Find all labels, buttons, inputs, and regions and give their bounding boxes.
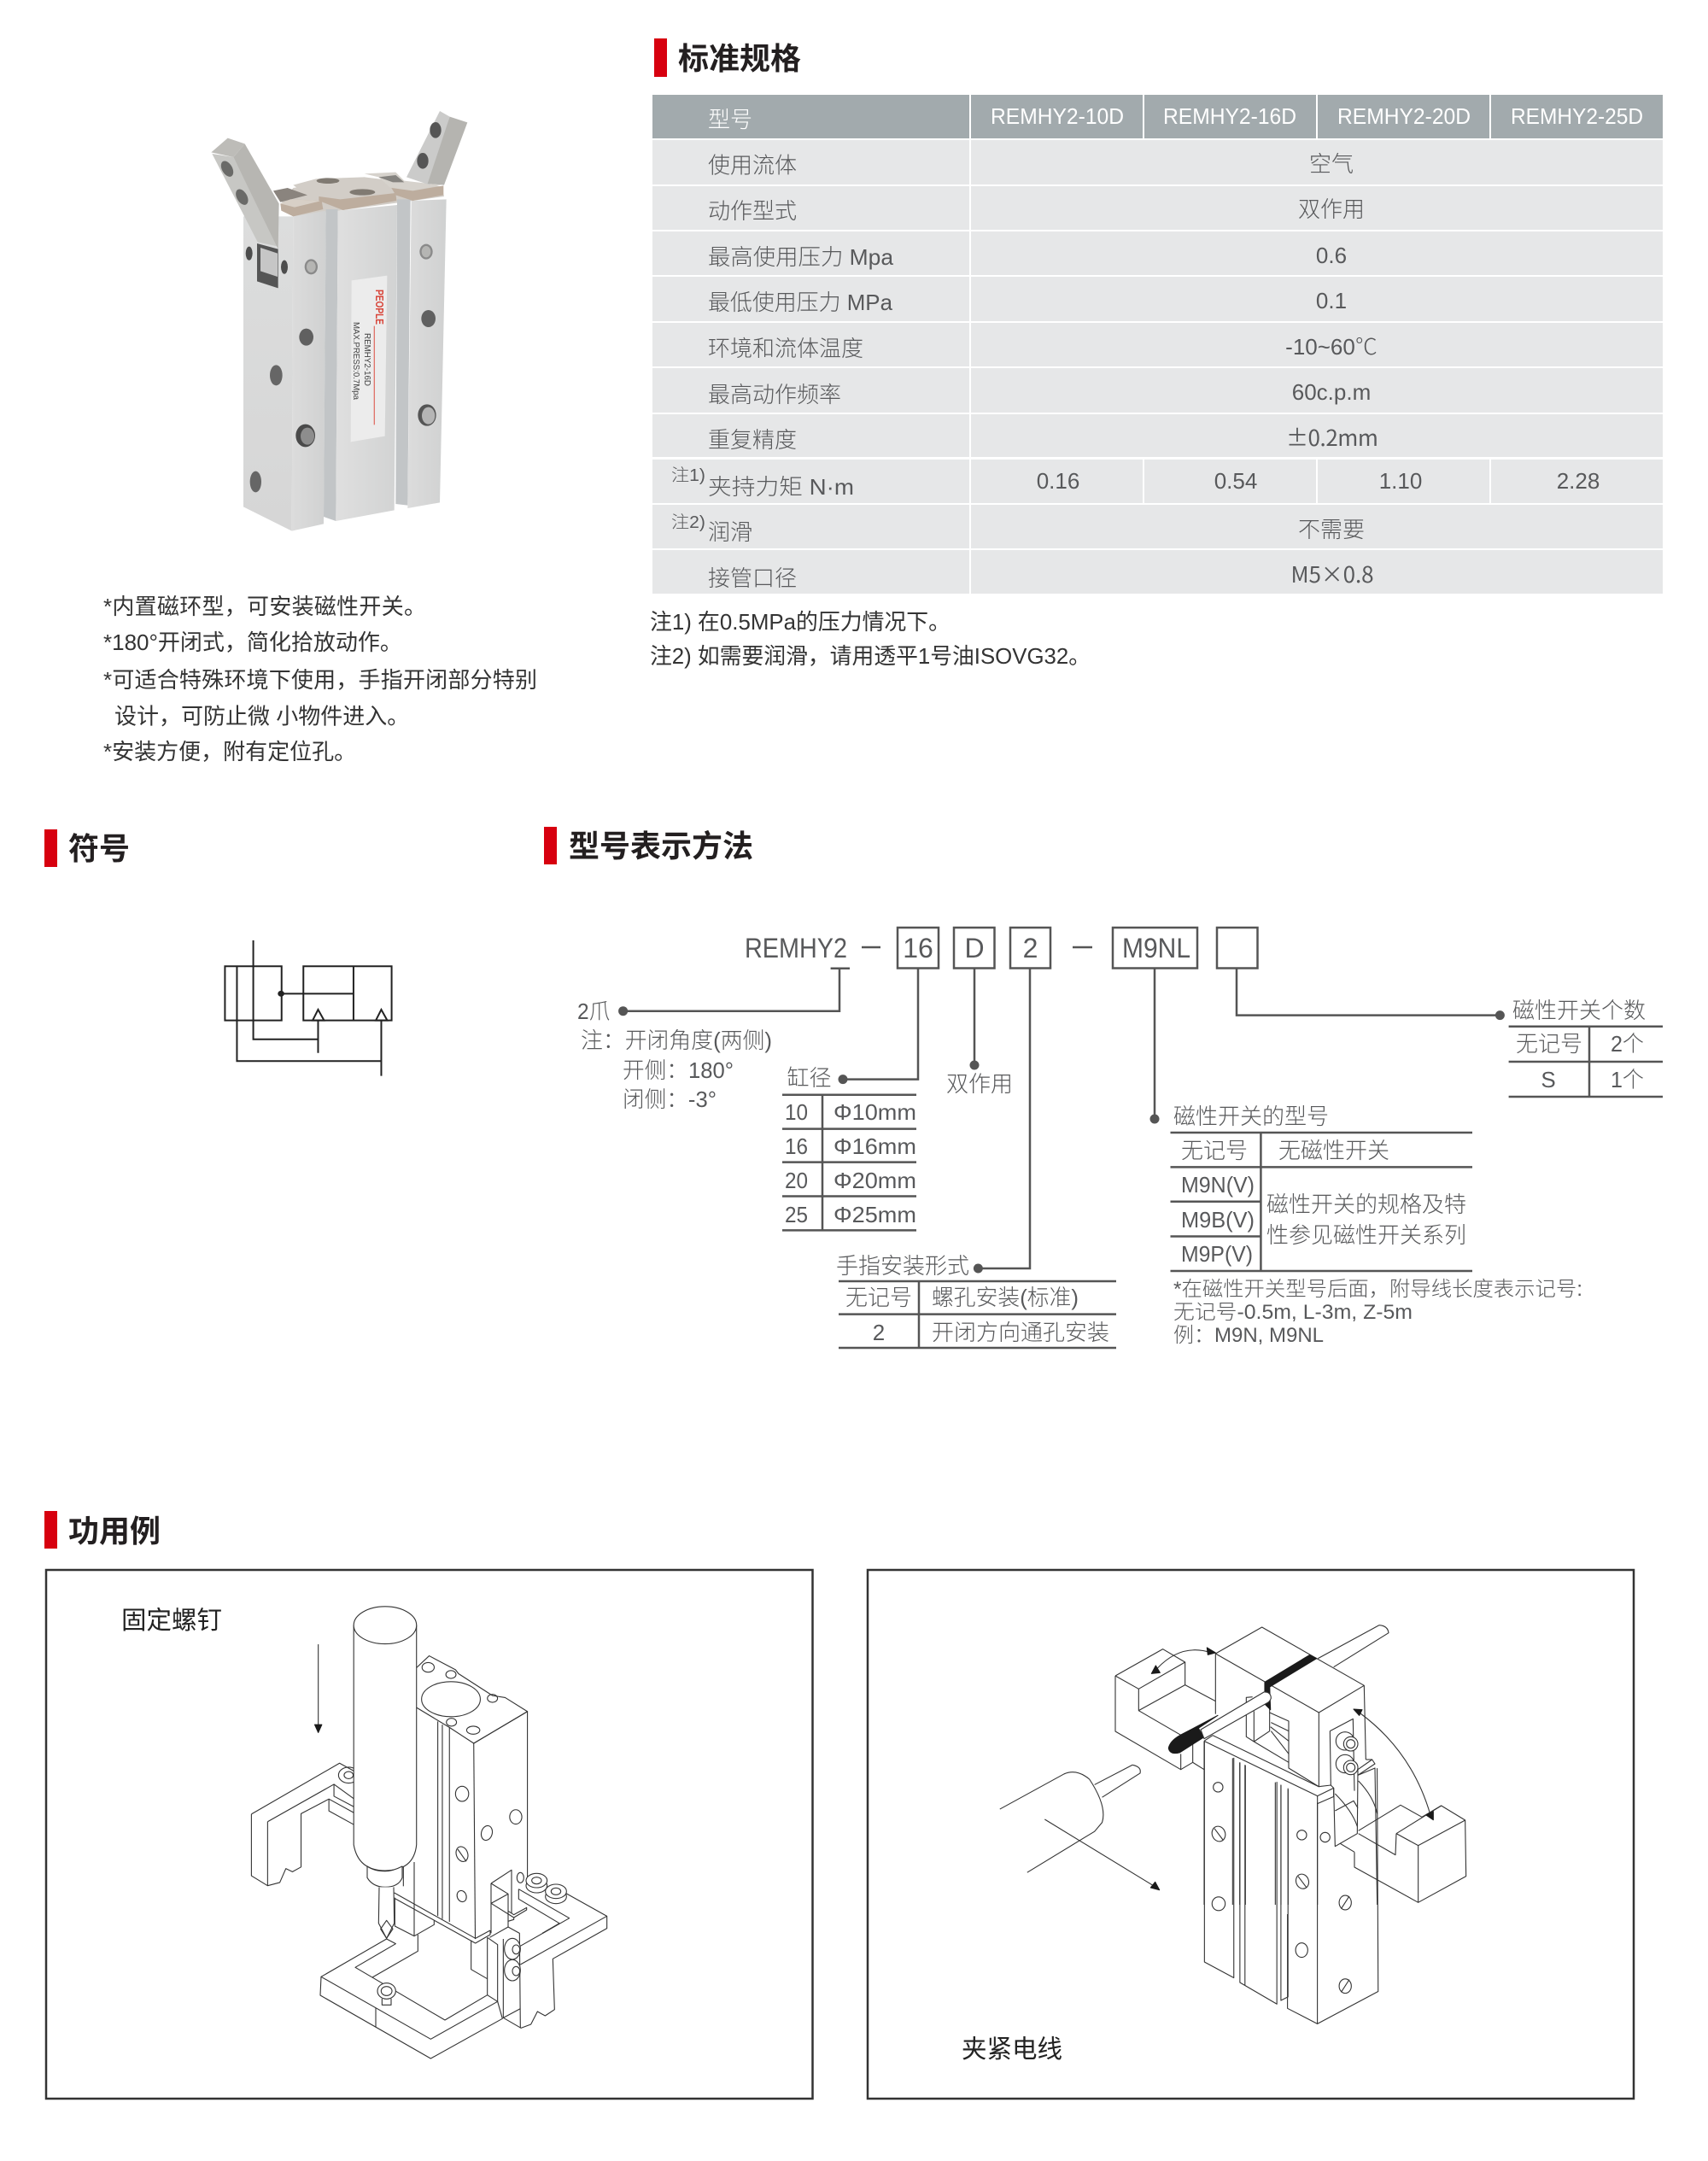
callout: 磁性开关的型号 table: 无记号-0.5m, L-3m, Z-5m <box>1173 1301 1413 1324</box>
callout: 缸径 table: Φ20mm <box>834 1168 916 1193</box>
callout: 磁性开关的型号 table: 无磁性开关 <box>1278 1138 1389 1163</box>
table body rows: 注1) <box>671 466 705 485</box>
panel label: 固定螺钉 <box>121 1607 222 1635</box>
table body rows: 动作型式 <box>708 198 797 224</box>
callout: 磁性开关个数 table: S <box>1541 1067 1556 1092</box>
callout: 缸径 table: 缸径 <box>787 1065 832 1091</box>
table footnotes: 注1) 在0.5MPa的压力情况下。 <box>650 609 951 635</box>
callout: 双作用 <box>946 969 1013 1097</box>
model code boxes: 2 <box>1023 933 1038 963</box>
feature list text <box>103 594 537 764</box>
table header row <box>652 95 1663 138</box>
callout: 缸径 table: Φ16mm <box>834 1133 916 1159</box>
callout: 磁性开关的型号 table <box>1149 969 1582 1347</box>
table header row: REMHY2-20D <box>1337 103 1471 129</box>
panel: 夹紧电线 <box>868 1570 1634 2099</box>
model code boxes: M9NL <box>1122 933 1190 963</box>
callout: 缸径 table: Φ10mm <box>834 1099 916 1125</box>
heading: 标准规格: 标准规格 <box>678 41 801 76</box>
callout: 手指安装形式 table: 手指安装形式 <box>836 1253 969 1279</box>
model code boxes <box>745 928 1257 969</box>
callout: 2爪 <box>577 969 850 1112</box>
table body rows: 1.10 <box>1379 468 1422 494</box>
model code diagram <box>577 928 1663 1348</box>
callout: 磁性开关的型号 table: 例：M9N, M9NL <box>1173 1324 1324 1347</box>
product photo: pneumatic gripper: MAX.PRESS:0.7Mpa <box>351 322 360 400</box>
line drawing: lower gripper body and air nipper <box>1000 1742 1378 2023</box>
table body rows: 环境和流体温度 <box>708 336 863 361</box>
table body rows: 双作用 <box>1298 196 1365 222</box>
callout: 缸径 table: 25 <box>785 1202 808 1227</box>
table body rows: 最高动作频率 <box>708 382 841 407</box>
table body rows: 0.54 <box>1214 468 1257 494</box>
feature list text: *内置磁环型，可安装磁性开关。 <box>103 594 426 619</box>
table body rows: 0.1 <box>1316 288 1347 313</box>
heading: 符号 <box>44 829 130 867</box>
table body rows: -10~60℃ <box>1285 334 1378 360</box>
model code boxes: D <box>964 933 985 963</box>
table header row: REMHY2-10D <box>991 103 1124 129</box>
product photo: pneumatic gripper: REMHY2-16D <box>362 333 371 386</box>
feature list text: *可适合特殊环境下使用，手指开闭部分特别 <box>103 667 537 693</box>
specification table <box>652 95 1663 594</box>
table body rows: 润滑 <box>708 519 752 545</box>
callout: 缸径 table: 16 <box>785 1133 808 1159</box>
callout: 磁性开关个数 table: 磁性开关个数 <box>1512 998 1646 1023</box>
table footnotes <box>650 609 1091 669</box>
callout: 磁性开关的型号 table: 磁性开关的型号 <box>1173 1104 1329 1129</box>
feature list text: *安装方便，附有定位孔。 <box>103 739 356 764</box>
callout: 磁性开关的型号 table: 性参见磁性开关系列 <box>1266 1222 1466 1248</box>
product photo: pneumatic gripper <box>211 111 467 531</box>
callout: 磁性开关个数 table: 无记号 <box>1516 1031 1582 1057</box>
panel: 固定螺钉 <box>46 1570 813 2099</box>
callout: 缸径 table: 20 <box>785 1168 808 1193</box>
table body rows: 空气 <box>1309 151 1354 177</box>
callout: 2爪: 开侧：180° <box>623 1057 734 1083</box>
callout: 手指安装形式 table: 无记号 <box>845 1285 912 1310</box>
arrow: downward <box>315 1644 322 1732</box>
pneumatic symbol diagram <box>225 940 392 1076</box>
table body rows: 接管口径 <box>708 565 797 591</box>
table body rows: M5×0.8 <box>1291 558 1373 589</box>
table body rows: 使用流体 <box>708 152 797 178</box>
callout: 磁性开关的型号 table: M9P(V) <box>1181 1241 1253 1267</box>
callout: 手指安装形式 table <box>836 969 1116 1348</box>
line drawing: upper gripper body, left jaw and screwdriver barrel <box>251 1607 528 1939</box>
callout: 磁性开关的型号 table: *在磁性开关型号后面，附导线长度表示记号: <box>1173 1278 1582 1301</box>
model code boxes: REMHY2 <box>745 933 847 963</box>
callout: 磁性开关的型号 table: M9N(V) <box>1181 1172 1255 1198</box>
heading: 型号表示方法: 型号表示方法 <box>569 829 753 864</box>
line drawing: lower jaws, bolts and screwdriver bit <box>320 1824 607 2059</box>
feature list text: *180°开闭式，简化拾放动作。 <box>103 630 402 655</box>
table header row: 型号 <box>708 107 752 132</box>
callout: 手指安装形式 table: 螺孔安装(标准) <box>932 1285 1079 1310</box>
callout: 缸径 table: Φ25mm <box>834 1202 916 1227</box>
product photo: pneumatic gripper: PEOPLE <box>373 290 385 325</box>
callout: 磁性开关个数 table <box>1237 969 1663 1097</box>
table footnotes: 注2) 如需要润滑，请用透平1号油ISOVG32。 <box>650 643 1091 669</box>
table body rows: 重复精度 <box>708 427 797 453</box>
model code boxes: 16 <box>903 933 933 963</box>
callout: 缸径 table: 10 <box>785 1099 808 1125</box>
heading: 功用例: 功用例 <box>68 1514 161 1549</box>
callout: 手指安装形式 table: 2 <box>873 1320 885 1345</box>
table body rows: 最高使用压力 Mpa <box>708 244 894 270</box>
callout: 2爪: 注：开闭角度(两侧) <box>581 1028 772 1053</box>
feature list text: 设计，可防止微 小物件进入。 <box>114 704 409 729</box>
table header row: REMHY2-16D <box>1163 103 1296 129</box>
line drawing: jaws, wire and upper gripper body <box>1115 1625 1466 1905</box>
callout: 2爪: 2爪 <box>577 999 610 1024</box>
heading: 符号: 符号 <box>68 831 130 866</box>
callout: 2爪: 闭侧：-3° <box>623 1086 717 1112</box>
callout: 磁性开关的型号 table: 磁性开关的规格及特 <box>1266 1192 1466 1217</box>
callout: 缸径 table <box>782 969 918 1230</box>
table body rows: 最低使用压力 MPa <box>708 290 893 315</box>
table body rows: 0.6 <box>1316 243 1347 268</box>
callout: 磁性开关个数 table: 2个 <box>1611 1031 1644 1057</box>
table body rows: 不需要 <box>1298 517 1365 542</box>
callout: 磁性开关的型号 table: 无记号 <box>1181 1138 1248 1163</box>
arrows: motion directions <box>1044 1648 1433 1890</box>
table body rows: 夹持力矩 N·m <box>708 474 854 500</box>
table body rows: 0.16 <box>1037 468 1079 494</box>
callout: 磁性开关个数 table: 1个 <box>1611 1067 1644 1092</box>
table body rows: 60c.p.m <box>1292 379 1371 405</box>
table body rows: ±0.2mm <box>1286 421 1378 453</box>
callout: 磁性开关的型号 table: M9B(V) <box>1181 1207 1255 1233</box>
table body rows: 注2) <box>671 512 705 532</box>
callout: 手指安装形式 table: 开闭方向通孔安装 <box>932 1320 1109 1345</box>
table body rows: 2.28 <box>1557 468 1600 494</box>
table body rows <box>652 140 1663 594</box>
callout: 双作用: 双作用 <box>946 1071 1013 1097</box>
table header row: REMHY2-25D <box>1511 103 1643 129</box>
panel label: 夹紧电线 <box>962 2035 1062 2064</box>
